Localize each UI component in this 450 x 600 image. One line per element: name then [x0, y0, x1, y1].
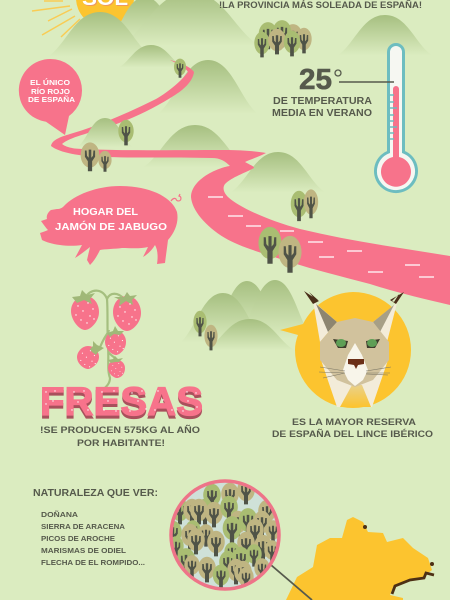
pig: jabugo ham: HOGAR DEL — [73, 207, 138, 218]
fresas caption: POR HABITANTE! — [77, 438, 165, 449]
speech bubble: red river — [19, 59, 82, 135]
lynx ears — [304, 291, 404, 342]
lynx caption: ES LA MAYOR RESERVA — [292, 417, 416, 428]
thermometer — [376, 45, 416, 192]
pig: jabugo ham — [40, 186, 181, 265]
nature list: FLECHA DE EL ROMPIDO... — [41, 558, 145, 567]
fresas title: FRESAS — [40, 383, 203, 427]
nature list — [33, 488, 158, 567]
sun with title — [32, 0, 175, 37]
lynx caption: DE ESPAÑA DEL LINCE IBÉRICO — [272, 429, 433, 440]
lower mountains and trees — [180, 280, 312, 350]
pig: jabugo ham: JAMÓN DE JABUGO — [55, 220, 167, 233]
fresas caption: !SE PRODUCEN 575KG AL AÑO — [40, 425, 200, 436]
temperature 25 degrees — [272, 64, 394, 119]
fresas title: FRESAS — [40, 380, 203, 424]
heading: sunniest province: !LA PROVINCIA MÁS SOLEADA DE ESPAÑA! — [219, 0, 422, 11]
nature list: PICOS DE AROCHE — [41, 534, 115, 543]
temperature 25 degrees: 25 — [299, 64, 332, 96]
small mountain over river — [78, 118, 132, 147]
nature list: NATURALEZA QUE VER: — [33, 488, 158, 499]
mountains middle — [142, 60, 326, 192]
nature list: SIERRA DE ARACENA — [41, 522, 126, 531]
speech bubble: red river: RÍO ROJO — [31, 87, 70, 96]
lynx badge — [280, 291, 411, 408]
temperature 25 degrees: MEDIA EN VERANO — [272, 108, 372, 119]
magnifier connector — [271, 565, 312, 600]
temperature 25 degrees: DE TEMPERATURA — [273, 96, 372, 107]
magnifier circle with forest — [164, 479, 281, 590]
river trees — [81, 59, 318, 273]
lynx caption — [272, 417, 433, 440]
lynx head — [319, 318, 391, 407]
top mountains — [48, 0, 433, 68]
strawberries plant — [71, 290, 141, 392]
fresas caption — [40, 425, 200, 449]
nature list: MARISMAS DE ODIEL — [41, 546, 126, 555]
red river — [51, 60, 450, 305]
tree group top — [254, 20, 312, 57]
nature list: DOÑANA — [41, 510, 79, 519]
river ripples — [208, 197, 434, 277]
speech bubble: red river: DE ESPAÑA — [28, 95, 76, 104]
speech bubble: red river: EL ÚNICO — [30, 78, 70, 87]
map of province — [286, 517, 434, 600]
